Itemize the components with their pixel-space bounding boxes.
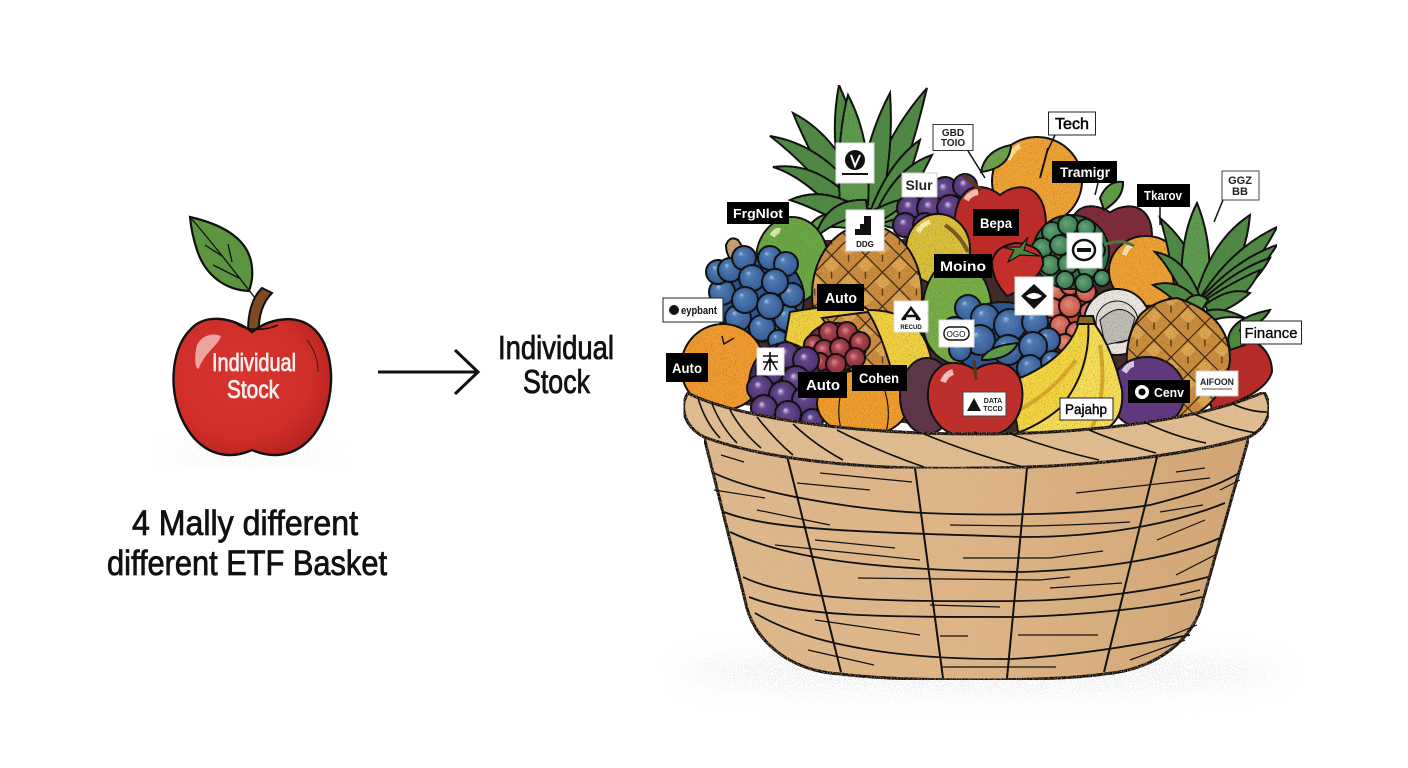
label: Auto centre <box>817 284 864 311</box>
green pear <box>922 225 992 365</box>
white coin <box>1084 289 1150 355</box>
wooden spoon handle <box>726 238 752 268</box>
pineapple crown left <box>770 85 932 238</box>
icon label: GBD TOIO <box>933 124 973 150</box>
label: Pajahp <box>1060 398 1113 420</box>
strawberry middle <box>992 237 1043 296</box>
red grapes left <box>806 323 866 371</box>
callout leader lines <box>968 135 1223 225</box>
weave horizontals <box>714 473 1239 659</box>
red apple front <box>928 343 1022 435</box>
label: Tkarov <box>1137 184 1190 207</box>
label: Moino: Moino <box>940 258 986 274</box>
apple body <box>174 319 331 455</box>
icon label: top right logo: GGZ <box>1228 175 1252 187</box>
strawberry right <box>1208 310 1272 410</box>
label: Tech: Tech <box>1055 116 1089 133</box>
maroon apple <box>1068 182 1152 272</box>
label: Pajahp: Pajahp <box>1065 401 1107 417</box>
plum brown <box>900 358 954 434</box>
label: Cohen <box>852 365 907 391</box>
icon label: house logo: RECUD <box>900 325 922 331</box>
label: Finance <box>1240 321 1302 344</box>
icon label: house logo <box>894 301 928 332</box>
label: Cenv <box>1128 380 1190 403</box>
orange top <box>992 137 1082 225</box>
pumpkin orange <box>817 370 909 436</box>
icon label: bar chart logo <box>846 210 884 251</box>
red grapes right <box>1042 276 1102 348</box>
basket <box>684 392 1269 680</box>
purple plum <box>1109 357 1185 429</box>
apple shadow <box>170 446 330 462</box>
label: eypbant <box>663 298 723 322</box>
pile backing <box>700 200 1250 434</box>
pineapple body right <box>1127 298 1230 423</box>
label: Moino <box>934 254 992 278</box>
label: eypbant: eypbant <box>681 305 717 317</box>
basket rim <box>684 392 1269 468</box>
icon label: small print logo <box>1196 371 1238 396</box>
yellow banana back <box>785 305 932 374</box>
icon label: oval logo <box>939 320 974 347</box>
purple grapes left <box>749 343 821 427</box>
rim slants <box>698 398 1267 467</box>
arrow <box>378 350 478 394</box>
weave verticals <box>787 456 1157 678</box>
pineapple lower left <box>822 312 892 372</box>
green apple left <box>756 217 828 303</box>
right heading: individual stock: Stock <box>523 363 590 400</box>
pineapple body left <box>812 225 922 365</box>
red apple back <box>954 175 1046 271</box>
label: Finance: Finance <box>1244 325 1298 342</box>
icon label: triangle logo <box>963 392 1006 416</box>
label: Auto left: Auto <box>672 360 702 376</box>
icon label: leaf logo <box>836 143 874 183</box>
caption: ETF basket: 4 Mally different <box>132 504 358 543</box>
icon label: sprout logo <box>757 348 784 375</box>
label: FrgNlot <box>727 202 789 224</box>
right heading: individual stock <box>498 329 614 400</box>
apple stem <box>248 288 272 333</box>
label: Auto left <box>666 353 708 382</box>
label: Cohen: Cohen <box>859 370 899 386</box>
purple grapes back <box>893 174 977 237</box>
apple icon: individual stock <box>170 217 331 462</box>
icon label: top right logo: BB <box>1232 186 1248 198</box>
label: Auto centre: Auto <box>825 290 857 307</box>
caption: ETF basket: different ETF Basket <box>107 544 387 583</box>
apple leaf <box>190 217 255 298</box>
yellow pear <box>906 214 970 284</box>
label: Bepa: Bepa <box>980 215 1012 231</box>
label: Slur <box>902 173 937 197</box>
green bumpy fruit <box>1033 215 1109 289</box>
basket body <box>704 437 1249 680</box>
label: Tkarov: Tkarov <box>1144 188 1183 203</box>
label: Bepa <box>973 209 1019 236</box>
orange right <box>1109 236 1183 306</box>
label: Tramigr: Tramigr <box>1060 164 1111 180</box>
top leaf <box>981 145 1011 172</box>
icon label: oval logo: OGO <box>947 330 965 339</box>
icon label: GBD TOIO: GBD <box>942 128 964 139</box>
label: FrgNlot: FrgNlot <box>733 206 784 221</box>
right heading: individual stock: Individual <box>498 329 614 366</box>
banana bunch <box>1010 316 1122 434</box>
icon label: small print logo: AIFOON <box>1200 377 1234 387</box>
icon label: triangle logo: TCCD <box>983 406 1003 413</box>
label: Auto lower <box>798 372 847 398</box>
blue grapes left <box>716 254 804 342</box>
apple label: Individual <box>212 349 296 377</box>
icon label: GBD TOIO: TOIO <box>941 138 965 149</box>
icon label: top right logo <box>1222 171 1259 200</box>
stem on orange right <box>1104 242 1134 246</box>
icon label: bar chart logo: DDG <box>856 240 874 249</box>
icon label: triangle logo: DATA <box>984 398 1002 405</box>
label: Slur: Slur <box>906 177 933 193</box>
icon label: black diamond logo <box>1015 277 1053 315</box>
weave short strokes <box>714 455 1240 667</box>
label: Tech <box>1048 112 1096 135</box>
icon label: diamond ring logo <box>1067 233 1102 268</box>
apple label line two: Stock <box>227 376 279 404</box>
label: Tramigr <box>1052 161 1117 183</box>
caption: ETF basket <box>107 504 387 583</box>
blue grapes right <box>953 302 1053 378</box>
fruit pile <box>681 85 1277 436</box>
label: Auto lower: Auto <box>806 377 840 394</box>
label: Cenv: Cenv <box>1154 385 1185 400</box>
pineapple crown right <box>1153 203 1277 328</box>
basket shadow <box>680 648 1280 696</box>
orange left <box>681 324 765 410</box>
